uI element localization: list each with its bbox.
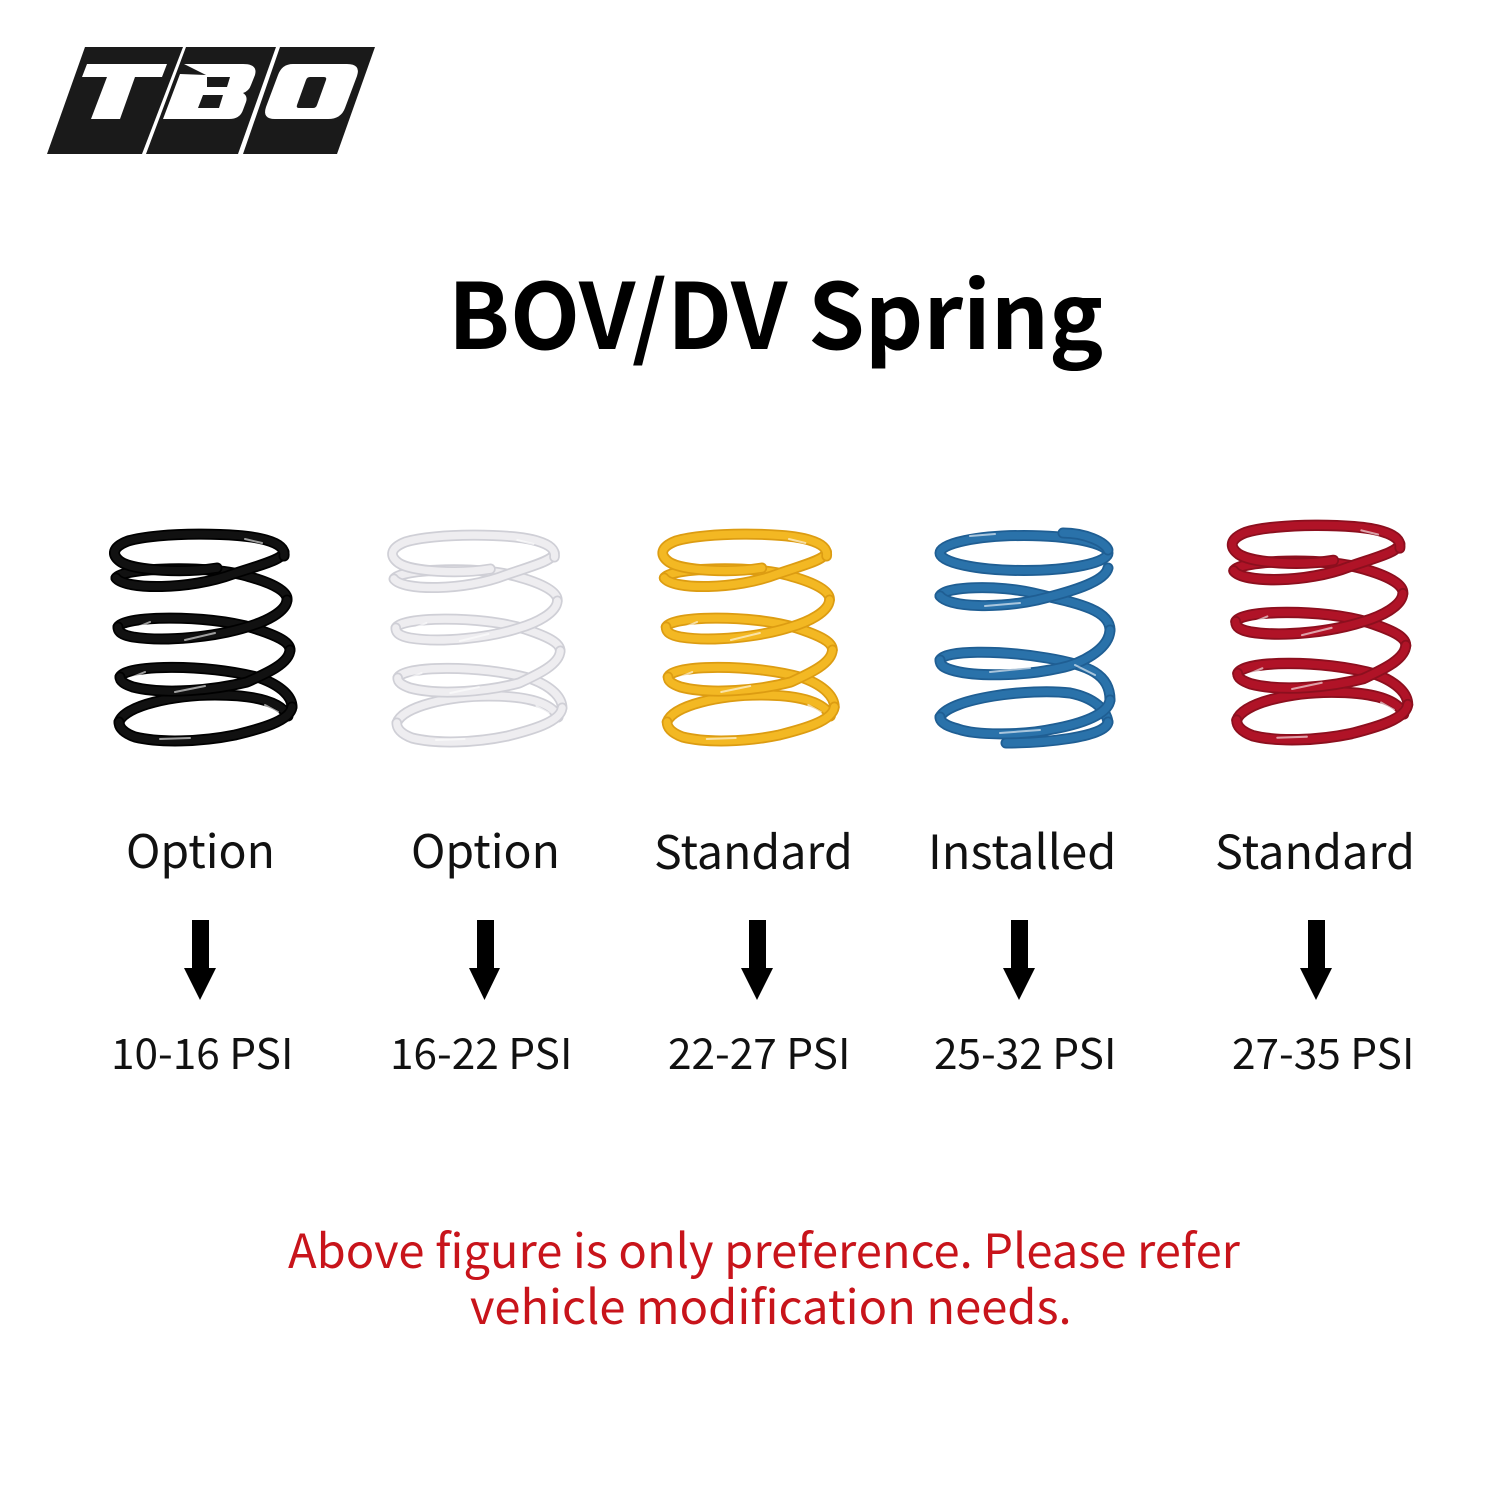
psi: 16-22: 16-22 PSI <box>390 1021 572 1082</box>
psi: 10-16: 10-16 PSI <box>111 1021 293 1082</box>
spring: yellow <box>663 534 834 741</box>
spring: red <box>1232 525 1408 740</box>
note: red disclaimer <box>288 1213 1241 1338</box>
label: Installed: Installed <box>928 814 1116 883</box>
arrow 2 <box>469 920 500 1000</box>
title: BOV/DV Spring <box>448 244 1103 376</box>
label: Standard 2: Standard <box>1215 816 1415 883</box>
arrow 5 <box>1300 920 1332 1000</box>
psi: 27-35: 27-35 PSI <box>1232 1021 1414 1082</box>
label: Option 2: Option <box>411 815 560 882</box>
spring: blue <box>940 533 1110 743</box>
label: Option 1: Option <box>126 815 275 882</box>
psi: 22-27: 22-27 PSI <box>668 1021 850 1082</box>
arrow 1 <box>184 920 216 1000</box>
arrow 4 <box>1003 920 1035 1000</box>
note: red disclaimer: vehicle modification needs. <box>470 1269 1072 1338</box>
note: red disclaimer: Above figure is only preference. Please refer <box>288 1213 1241 1282</box>
label: Standard 1: Standard <box>654 816 853 883</box>
spring: white <box>392 535 562 742</box>
logo: TBO <box>47 47 375 154</box>
psi: 25-32: 25-32 PSI <box>934 1021 1116 1082</box>
arrow 3 <box>741 920 773 1000</box>
spring: black <box>115 534 292 741</box>
